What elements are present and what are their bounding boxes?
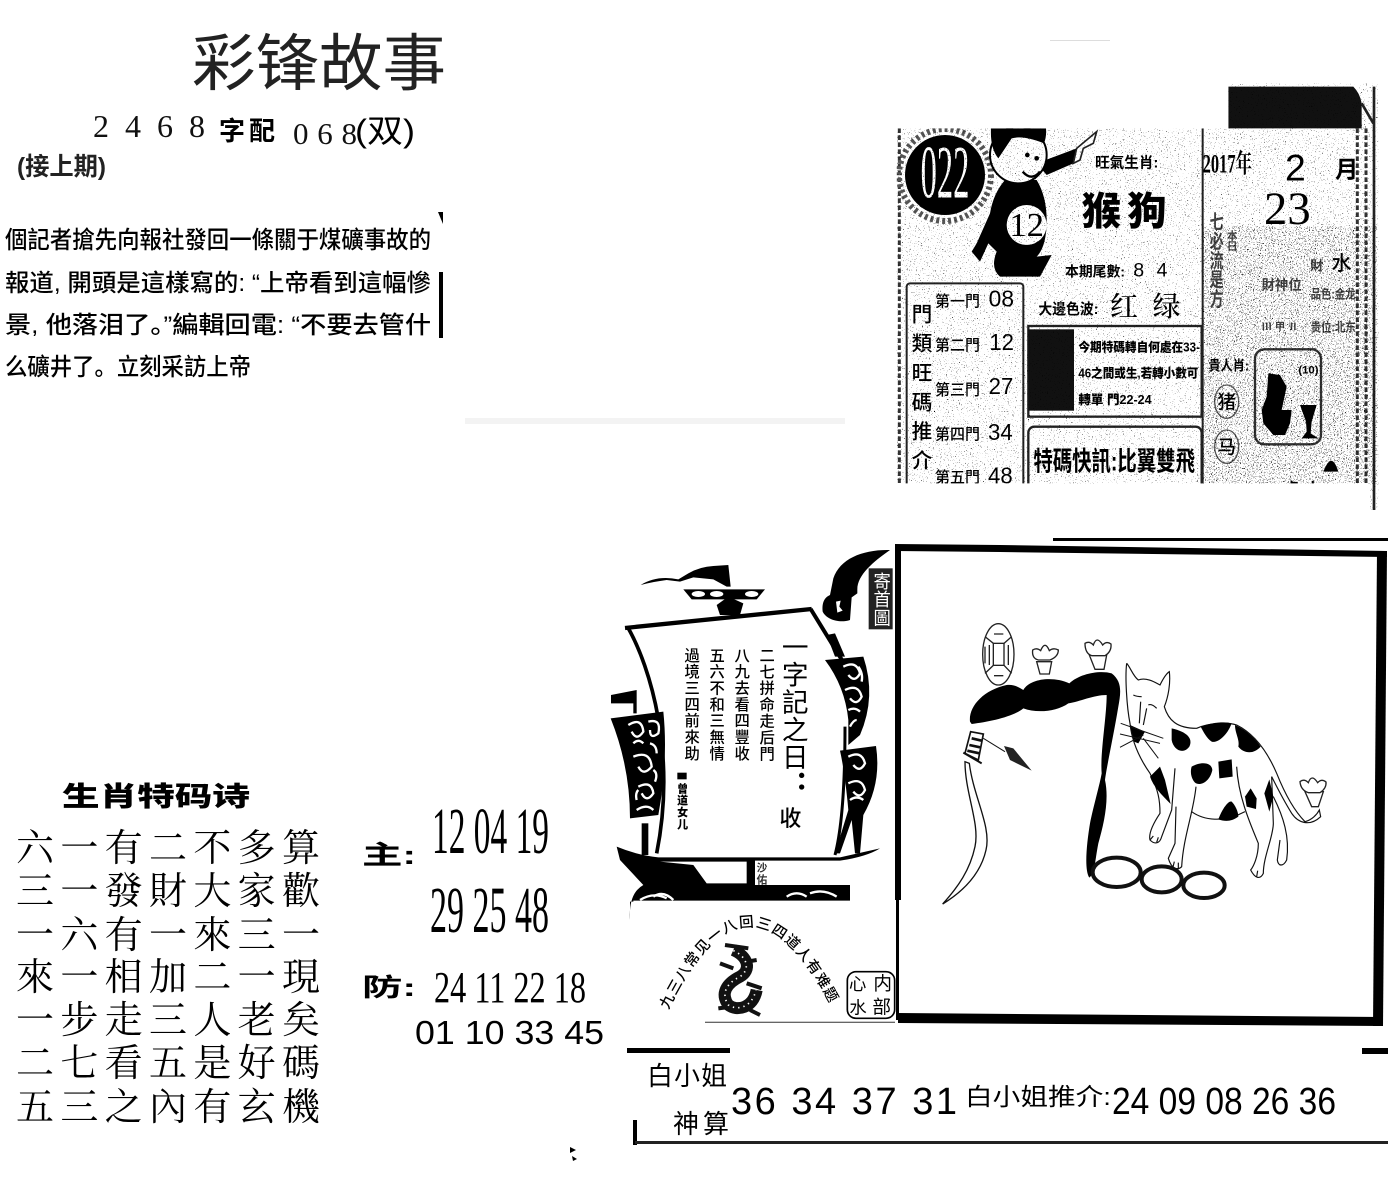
panel: door numbers: 27 [989,373,1013,399]
tail numbers: 本期尾數: [1065,264,1125,280]
title: 彩锋故事 [192,30,446,99]
panel: main and guard numbers: 主: [362,840,416,870]
special flash [1027,426,1203,484]
panel: door numbers: 旺 [912,362,932,385]
arc verse: 九三八常见一八回三四道人有难题 [660,914,840,1010]
poem lines: 三一發財大家歡 [16,871,320,913]
lucky zodiac: 狗 [1127,190,1167,234]
stamp: inner tip: 部 [872,996,891,1017]
panel: bottom numbers strip: 24 09 08 26 36 [1112,1081,1336,1123]
lucky zodiac [1082,154,1167,234]
stones [1093,858,1225,898]
almanac notes: 品色:金龙 [1311,286,1356,301]
icon: sword [943,732,1032,904]
badge 022 [899,129,991,221]
print speckle [890,80,1388,513]
cat spots [1120,722,1273,821]
rear sails [611,690,665,855]
panel: bottom numbers strip: 白小姐 [647,1061,727,1091]
feather and helmet [822,550,890,657]
panel: main and guard numbers: 24 11 22 18 [434,963,586,1012]
panel: door numbers: 門 [912,304,932,327]
main sail [625,609,845,855]
panel: zodiac poem [16,782,321,1129]
panel: main and guard numbers: 12 04 19 [432,795,549,868]
noble zodiac: 貴人肖: [1208,358,1249,374]
stamp: inner tip: 水 [849,997,867,1017]
panel: sailing ship [611,550,893,920]
colour wave: 红 绿 [1110,291,1181,323]
panel: door numbers: 08 [989,286,1014,312]
sail verses: 一字記之日 [778,633,808,770]
seal tag: 寄首圖 [871,572,891,627]
header dark band [1228,87,1362,128]
panel: dragon arc verse [660,914,896,1023]
panel: door numbers [907,283,1023,497]
panel: newspaper clipping [890,80,1388,513]
almanac notes: 本日 [1226,229,1238,252]
panel: door numbers: 類 [912,333,933,356]
black ridge stroke [970,672,1120,878]
continued note: (接上期) [17,153,106,181]
panel: door numbers: 34 [988,419,1013,445]
panel: newspaper clipping: 虎 虫 [1283,480,1322,499]
poem heading: 生肖特码诗 [62,782,250,812]
noble zodiac: 马 [1217,436,1236,457]
hull: 佑 [757,873,768,886]
panel: bottom numbers strip: 白小姐推介: [965,1084,1111,1111]
colour wave: 大邊色波: [1038,300,1098,318]
sail verses [676,633,808,831]
panel: main and guard numbers: 防: [362,974,416,1002]
panel: puzzle picture frame [895,538,1388,1026]
subtitle: digit pairing: 字配 [219,116,275,146]
cartoon boy: 12 [1009,207,1044,244]
hull: 沙 [757,863,768,875]
date: 2 [1285,147,1306,189]
date: 月 [1335,156,1358,182]
subtitle: digit pairing: 068 [293,116,357,151]
lucky zodiac: 猴 [1082,190,1121,234]
subtitle: digit pairing [93,108,415,151]
panel: door numbers: 12 [989,329,1014,355]
panel: bottom numbers strip [627,1048,1388,1145]
tail numbers [1065,263,1167,278]
story paragraph: 報道, 開頭是這樣寫的: “上帝看到這幅慘 [5,270,431,297]
tip box [1028,326,1202,417]
almanac notes: Ⅲ 甲 Ⅱ [1262,321,1298,333]
heavy speckle: right column [1203,227,1377,483]
picture: cat and objects [943,624,1326,904]
panel: door numbers: 碼 [912,391,932,414]
poem lines: 一步走三人老矣 [16,1000,320,1042]
panel: door numbers: 第五門 [935,469,980,487]
sail verses: 曾道女儿 [676,781,688,830]
lucky zodiac: 旺氣生肖: [1095,154,1158,171]
almanac notes: 七必流是方 [1209,212,1225,310]
poem lines: 五三之內有玄機 [16,1087,321,1129]
story paragraph: 么礦井了。立刻采訪上帝 [5,354,251,381]
icon: coin [983,624,1014,685]
hull [617,847,880,920]
icon: dragon [718,945,762,1015]
story paragraph: 個記者搶先向報社發回一條關于煤礦事故的 [5,227,431,254]
panel: main and guard numbers: 01 10 33 45 [415,1014,604,1051]
panel: door numbers: 介 [912,449,933,472]
panel: door numbers: 第一門 [935,293,980,311]
tip box: 46之間或生,若轉小數可 [1078,365,1199,380]
sail verses: 八九去看四豐收 [732,647,750,761]
panel: bottom numbers strip: 神算 [673,1109,729,1139]
sail verses: 收 [779,806,801,831]
sail verses: 二七拼命走后門 [757,647,775,762]
tip box: 轉單 門22-24 [1078,392,1152,407]
stamp: inner tip [847,972,895,1018]
panel: main and guard numbers [362,795,604,1051]
stamp: inner tip: 内 [873,973,892,994]
stamp: inner tip: 心 [849,974,866,994]
special flash: 特碼快訊:比翼雙飛 [1033,447,1195,477]
noble zodiac [1208,358,1249,463]
panel: door numbers: 第三門 [935,381,980,399]
subtitle: digit pairing: (双) [355,113,415,149]
noble zodiac: 猪 [1217,391,1236,412]
cartoon boy [972,127,1097,277]
almanac notes: 水 [1332,252,1352,275]
tip box: 今期特碼轉自何處在33- [1078,340,1200,355]
poem lines [16,828,321,1129]
colour wave [1039,292,1180,319]
panel: door numbers: 第四門 [935,425,980,443]
date: 23 [1264,183,1311,235]
poem lines: 六一有二不多算 [16,828,320,870]
panel: main and guard numbers: 29 25 48 [430,874,549,947]
right banners [825,657,877,853]
poem lines: 來一相加二一現 [16,957,320,999]
almanac notes: 財神位 [1262,277,1302,293]
panel: door numbers: 48 [988,462,1013,488]
almanac notes: 贵位:北东 [1311,320,1356,335]
panel: bottom numbers strip: 36 34 37 31 [731,1081,957,1123]
date: 2017年 [1203,149,1252,179]
panel: door numbers: 推 [912,420,932,443]
poem lines: 一六有一來三一 [16,915,320,957]
story paragraph: 景, 他落泪了。”編輯回電: “不要去管什 [5,312,431,339]
almanac notes [1209,212,1356,335]
icon: ingots [1033,640,1326,807]
story paragraph [5,227,431,381]
badge 022: 022 [921,131,969,214]
sail verses: 過境三四前來助 [682,647,700,762]
tail numbers: 8 4 [1133,261,1168,282]
date [1203,150,1355,224]
panel: door numbers: 第二門 [935,337,980,355]
subtitle: digit pairing: 2468 [93,108,205,144]
icon: figure vignette [1255,349,1321,444]
almanac notes: 財 [1310,258,1323,273]
poem lines: 二七看五是好碼 [16,1043,320,1085]
pennant and crow's nest [641,565,765,615]
cat [1126,663,1321,877]
sail verses: 五六不和三無情 [707,647,725,762]
icon: figure vignette: (10) [1298,364,1319,376]
